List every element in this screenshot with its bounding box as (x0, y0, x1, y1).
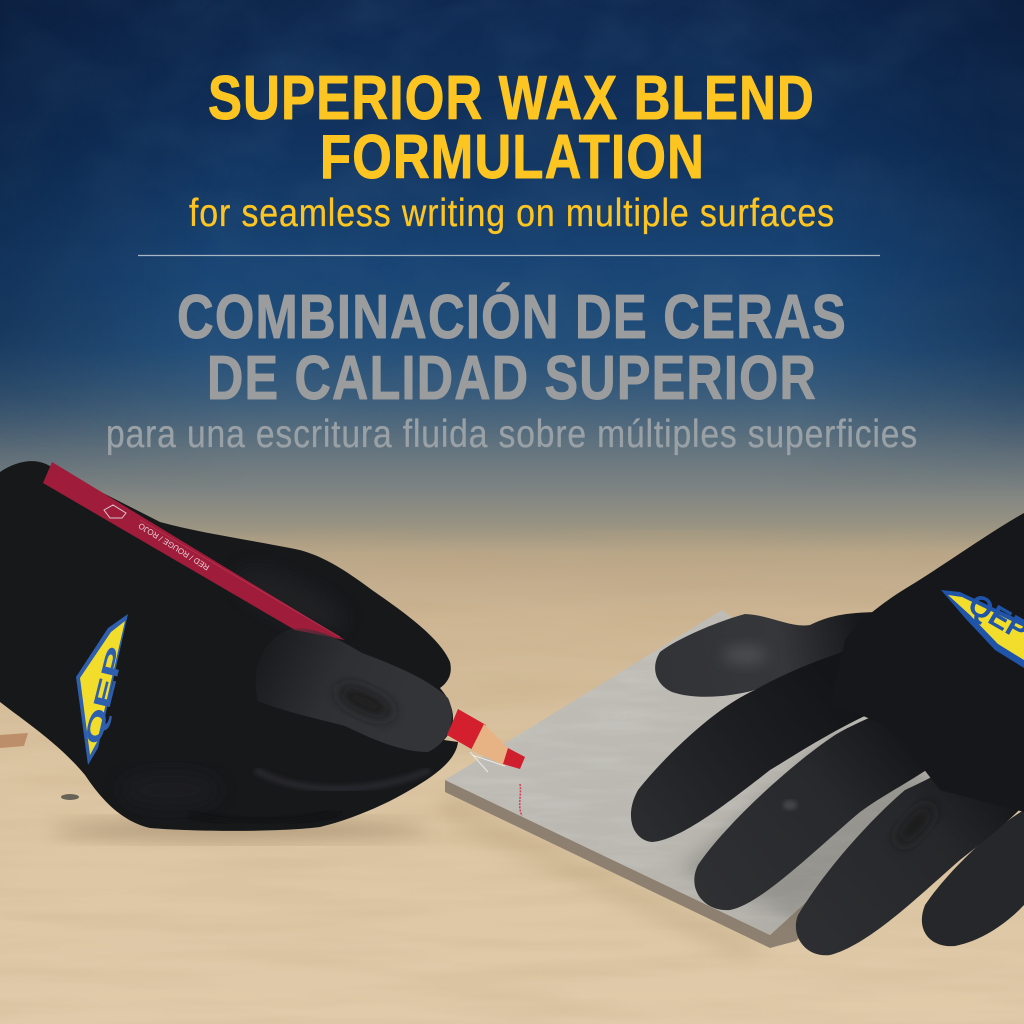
logo on right glove (941, 587, 1024, 668)
left glove holding pencil (0, 461, 525, 840)
subtitle: Spanish: para una escritura fluida sobre múltiples superficies (106, 413, 918, 456)
thumb (256, 628, 452, 752)
finger crease shading (255, 770, 430, 789)
pencil: RED / ROUGE / ROJO (137, 521, 211, 572)
title: Spanish heading: DE CALIDAD SUPERIOR (207, 344, 817, 413)
shadow of fingers on tile (680, 730, 950, 920)
title: English heading: SUPERIOR WAX BLEND (208, 64, 815, 133)
pencil tip (447, 709, 525, 772)
knuckle shading (120, 555, 354, 808)
top finger resting on tile (655, 612, 885, 697)
red pencil mark on tile (520, 784, 522, 816)
middle finger (694, 690, 960, 910)
tile being marked (440, 605, 950, 960)
little finger (922, 810, 1024, 946)
ring finger (796, 740, 1024, 955)
index finger (631, 640, 900, 842)
pencil (43, 462, 345, 640)
title: Spanish heading: COMBINACIÓN DE CERAS (177, 283, 847, 352)
logo on glove back: QEP (80, 644, 130, 747)
title: English heading (208, 64, 815, 192)
title: Spanish heading (177, 283, 847, 413)
subtitle: English: for seamless writing on multiple surfaces (189, 192, 835, 235)
right glove on tile (631, 513, 1024, 955)
back of hand (830, 513, 1024, 812)
title: English heading: FORMULATION (320, 123, 705, 192)
logo on glove back (76, 614, 130, 765)
glove body (0, 461, 458, 831)
